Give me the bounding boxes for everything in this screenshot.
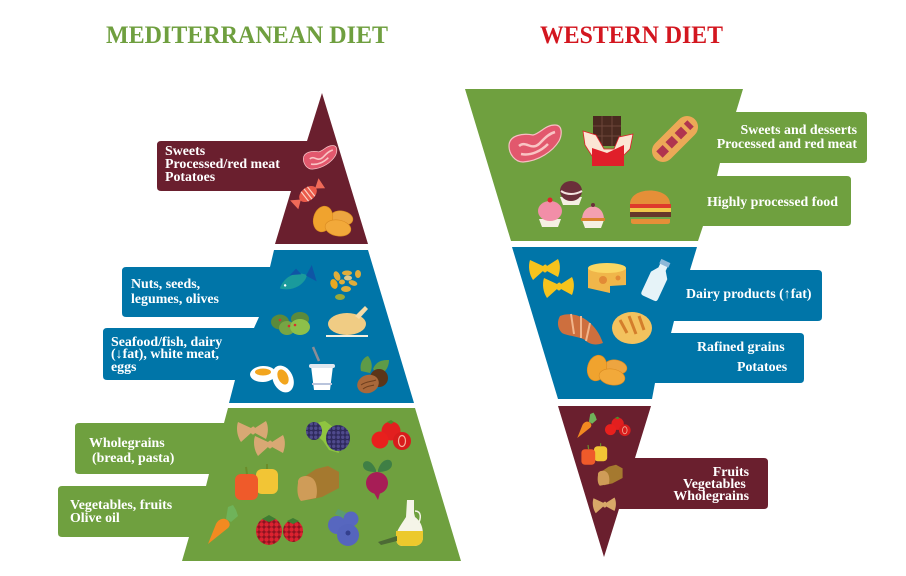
icon: croissant: [558, 314, 603, 344]
tier shape: [157, 93, 368, 244]
icon: fish: [275, 263, 318, 294]
label: sweets, processed and red meat: Sweets and desserts: [740, 123, 858, 138]
icon: cheese: [588, 263, 626, 293]
icon: bread loaf: [612, 312, 652, 344]
icon: seeds: [329, 270, 361, 300]
label: refined grains, potatoes: Rafined grains: [697, 340, 785, 355]
label: fruits, vegetables, wholegrains: Fruits: [713, 465, 750, 480]
icon: eggs: [250, 362, 298, 396]
label: seafood, dairy, white meat, eggs: Seafood/fish, dairy: [111, 335, 222, 350]
panel: Mediterranean middle tier: [103, 250, 414, 403]
icon: chicken: [326, 306, 368, 337]
label: sweets, meat, potatoes: Processed/red meat: [165, 157, 280, 172]
icon: peppers: [235, 464, 278, 500]
icon: milk bottle: [640, 257, 674, 302]
label: sweets, meat, potatoes: [165, 144, 280, 185]
label: wholegrains: Wholegrains: [89, 436, 165, 451]
icon: pasta: [237, 421, 285, 456]
icon: hot dog: [647, 111, 703, 167]
tier shape: [558, 406, 768, 557]
panel: Western top tier: [465, 89, 867, 241]
icon: tomatoes: [605, 417, 631, 436]
icon: cupcakes: [538, 181, 605, 228]
panel: Mediterranean top tier: [157, 93, 368, 244]
icon: olives: [271, 312, 310, 335]
icon: bread: [598, 465, 623, 486]
icon: beet: [363, 460, 392, 500]
icon: potatoes: [584, 353, 628, 387]
label: wholegrains: [89, 436, 175, 466]
label: wholegrains: (bread, pasta): [92, 451, 175, 466]
icon: potatoes: [310, 204, 354, 238]
label: fruits, vegetables, wholegrains: Wholegrains: [673, 489, 750, 504]
label: refined grains, potatoes: [697, 340, 788, 375]
icon: yogurt: [309, 347, 335, 390]
icon: carrot: [577, 413, 597, 438]
panel: Mediterranean bottom tier: [58, 408, 461, 561]
icon: olive oil bottle: [378, 500, 423, 546]
title: Western diet: WESTERN DIET: [540, 22, 723, 49]
tier shape: [58, 408, 461, 561]
label: vegetables, fruits, olive oil: [70, 498, 173, 526]
label: refined grains, potatoes: Potatoes: [737, 360, 788, 375]
icon: peppers: [581, 443, 607, 465]
icon: burger: [630, 190, 671, 224]
label: nuts, seeds, legumes, olives: Nuts, seeds,: [131, 277, 200, 292]
icon: chocolate: [583, 116, 633, 166]
icon: raspberries: [256, 515, 303, 545]
label: nuts, seeds, legumes, olives: [131, 277, 220, 307]
icon: meat: [303, 145, 337, 169]
icon: tomatoes: [372, 420, 411, 450]
icon: carrot: [208, 505, 238, 544]
icon: blueberries: [328, 509, 359, 546]
label: vegetables, fruits, olive oil: Vegetables, fruits: [70, 498, 173, 513]
icon: yellow pasta: [529, 259, 574, 298]
label: seafood, dairy, white meat, eggs: (↓fat), white meat,: [111, 347, 219, 362]
tier shape: [512, 247, 822, 399]
tier shape: [465, 89, 867, 241]
icon: pasta: [593, 498, 616, 513]
label: seafood, dairy, white meat, eggs: [111, 335, 222, 375]
label: sweets, processed and red meat: [717, 123, 858, 152]
icon: candy: [290, 178, 326, 210]
label: sweets, meat, potatoes: Sweets: [165, 144, 206, 159]
title: Mediterranean diet: MEDITERRANEAN DIET: [106, 22, 388, 49]
label: sweets, meat, potatoes: Potatoes: [165, 170, 216, 185]
label: sweets, processed and red meat: Processed and red meat: [717, 137, 857, 152]
label: vegetables, fruits, olive oil: Olive oil: [70, 511, 120, 526]
icon: walnut: [355, 356, 389, 396]
tier shape: [103, 250, 414, 403]
label: fruits, vegetables, wholegrains: [673, 465, 750, 504]
label: fruits, vegetables, wholegrains: Vegetables: [683, 477, 746, 492]
icon: steak: [509, 125, 561, 162]
label: highly processed food: Highly processed food: [707, 195, 838, 210]
label: dairy products: Dairy products (↑fat): [686, 287, 812, 302]
icon: bread: [297, 466, 339, 501]
panel: Western middle tier: [512, 247, 822, 399]
label: seafood, dairy, white meat, eggs: eggs: [111, 360, 137, 375]
icon: blackberries: [306, 421, 350, 453]
panel: Western bottom tier: [558, 406, 768, 557]
label: nuts, seeds, legumes, olives: legumes, olives: [131, 292, 220, 307]
